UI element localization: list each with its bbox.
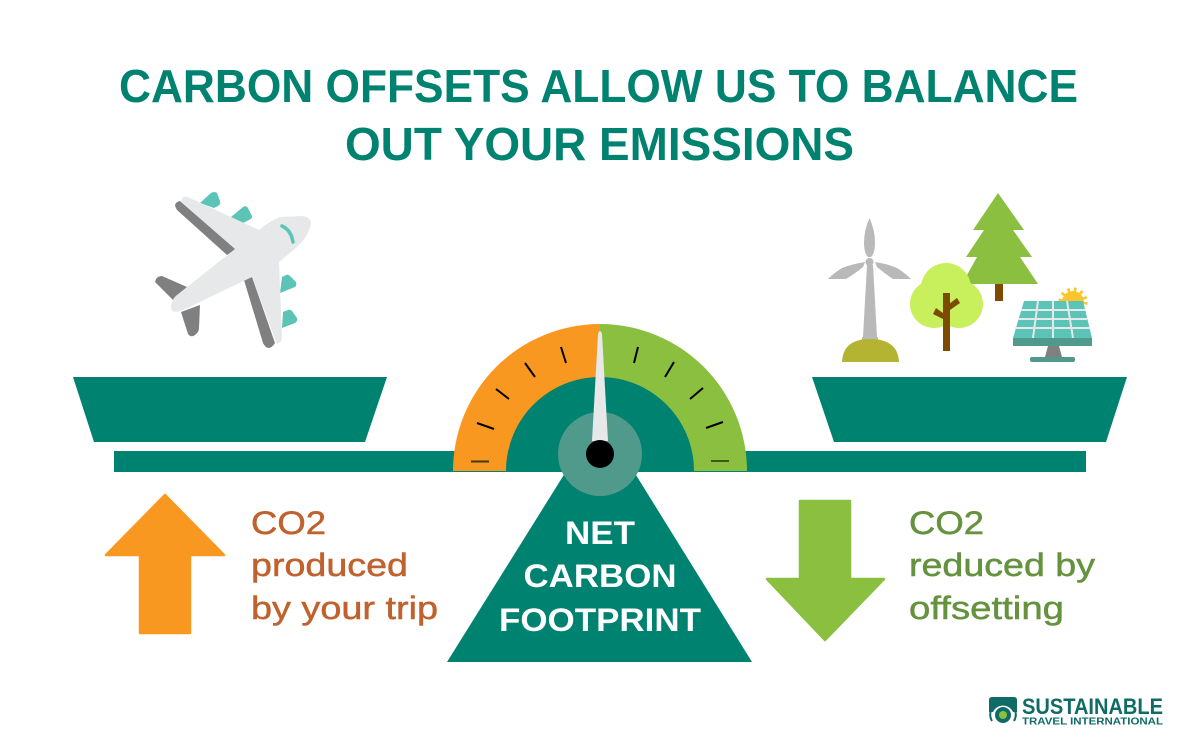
- icon: airplane: [155, 192, 311, 348]
- title: [119, 60, 1078, 170]
- icon: wind turbine: [828, 218, 911, 362]
- fulcrum label: NET: [565, 515, 635, 551]
- panel: fulcrum triangle: [447, 417, 752, 662]
- text: CO2 produced: [251, 505, 438, 626]
- fulcrum label: [499, 515, 701, 638]
- panel: right scale tray: [812, 377, 1127, 442]
- icon: round tree: [910, 263, 983, 351]
- logo: [989, 694, 1164, 728]
- fulcrum label: FOOTPRINT: [499, 602, 701, 638]
- title: OUT YOUR EMISSIONS: [345, 118, 854, 170]
- text: CO2 reduced: offsetting: [909, 590, 1064, 626]
- logo: TRAVEL INTERNATIONAL: [1022, 716, 1164, 728]
- gauge: [453, 324, 747, 496]
- text: CO2 produced: produced: [251, 547, 408, 583]
- icon: pine tree: [962, 193, 1038, 301]
- panel: left scale tray: [73, 377, 387, 442]
- arrow: up orange: [106, 495, 224, 633]
- title: CARBON OFFSETS ALLOW US TO BALANCE: [119, 60, 1078, 112]
- text: CO2 produced: CO2: [251, 505, 326, 541]
- text: CO2 reduced: reduced by: [909, 547, 1095, 583]
- fulcrum label: CARBON: [524, 558, 676, 594]
- logo: SUSTAINABLE: [1022, 694, 1163, 719]
- icon: solar panel: [1013, 290, 1092, 362]
- text: CO2 produced: by your trip: [251, 590, 438, 626]
- scale beam: [114, 451, 1086, 472]
- text: CO2 reduced: CO2: [909, 505, 984, 541]
- text: CO2 reduced: [909, 505, 1095, 626]
- arrow: down green: [767, 501, 884, 640]
